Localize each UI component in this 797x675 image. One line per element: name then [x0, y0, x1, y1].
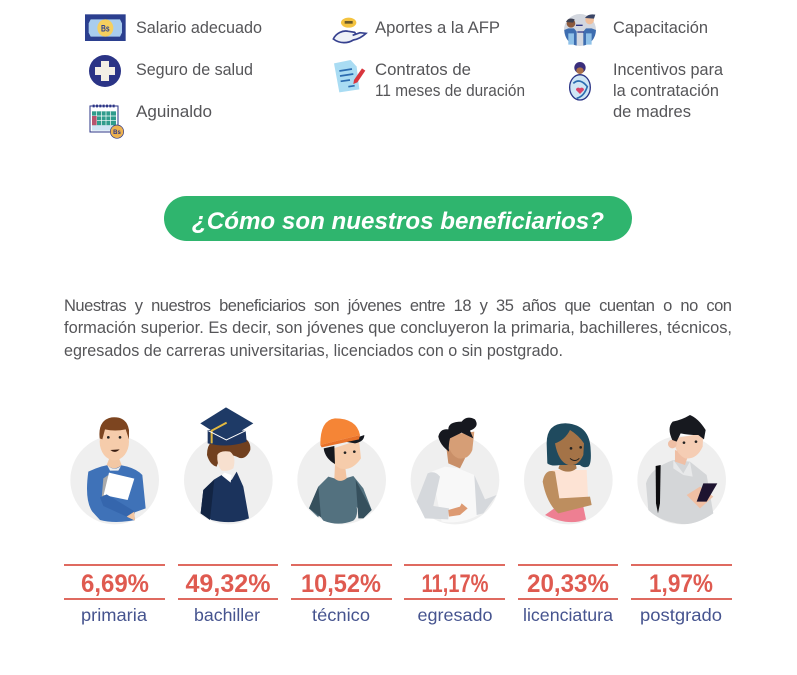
stat: bachiller: 49,32% — [186, 570, 270, 598]
text: incentivos — [613, 61, 724, 121]
person: tecnico — [297, 418, 386, 524]
person: primaria — [70, 417, 159, 524]
icon: calendar with coin — [90, 106, 124, 138]
stat: postgrado — [631, 565, 732, 625]
text: incentivos: Incentivos para — [613, 61, 724, 79]
heading pill — [164, 196, 632, 241]
stat: primaria — [64, 565, 165, 625]
text block: description — [64, 297, 732, 360]
heading pill: ¿Cómo son nuestros beneficiarios? — [192, 208, 604, 235]
stat: egresado — [404, 565, 505, 625]
text: aportes: Aportes a la AFP — [375, 19, 500, 37]
text: seguro: Seguro de salud — [136, 61, 253, 79]
stat: primaria: primaria — [81, 605, 147, 625]
stat: licenciatura: licenciatura — [523, 605, 613, 625]
text block: description: egresados de carreras universitarias, licenciados con o sin postgrado. — [64, 342, 563, 360]
text: incentivos: de madres — [613, 103, 691, 121]
icon: calendar with coin: Bs — [113, 130, 121, 136]
text: contratos: Contratos de — [375, 61, 471, 79]
stat: bachiller: bachiller — [194, 605, 260, 625]
icon: mother and baby — [570, 62, 590, 100]
person: egresado — [411, 418, 499, 524]
person: postgrado — [637, 415, 726, 524]
stat: postgrado: postgrado — [640, 605, 722, 625]
stat: postgrado: 1,97% — [649, 570, 713, 598]
icon: contract document — [334, 60, 365, 92]
person: licenciatura — [524, 423, 613, 524]
text: salario: Salario adecuado — [136, 19, 262, 37]
stat: tecnico — [291, 565, 392, 625]
stat: tecnico: técnico — [312, 605, 370, 625]
stat: egresado: egresado — [418, 605, 492, 625]
icon: health cross — [89, 55, 121, 87]
stat: primaria: 6,69% — [81, 570, 149, 598]
stat: tecnico: 10,52% — [301, 570, 381, 598]
person: bachiller — [184, 407, 273, 524]
stat: egresado: 11,17% — [422, 570, 488, 598]
text: contratos — [375, 61, 525, 100]
text: capacitacion: Capacitación — [613, 19, 708, 37]
icon: banknote — [85, 14, 126, 41]
icon: banknote: Bs — [101, 23, 110, 33]
icon: hand with coin — [333, 18, 366, 43]
stat: licenciatura: 20,33% — [527, 570, 609, 598]
text block: description: formación superior. Es decir, son jóvenes que concluyeron la primaria, bachilleres, técnicos, — [64, 319, 732, 337]
stat: licenciatura — [518, 565, 618, 625]
text: contratos: 11 meses de duración — [375, 82, 525, 100]
icon: training people — [564, 14, 596, 46]
text block: description: Nuestras y nuestros beneficiarios son jóvenes entre 18 y 35 años que cuentan o no con — [64, 297, 732, 315]
text: incentivos: la contratación — [613, 82, 719, 100]
text: aguinaldo: Aguinaldo — [136, 103, 212, 121]
panel: benefits list — [85, 14, 724, 138]
stat: bachiller — [178, 565, 278, 625]
